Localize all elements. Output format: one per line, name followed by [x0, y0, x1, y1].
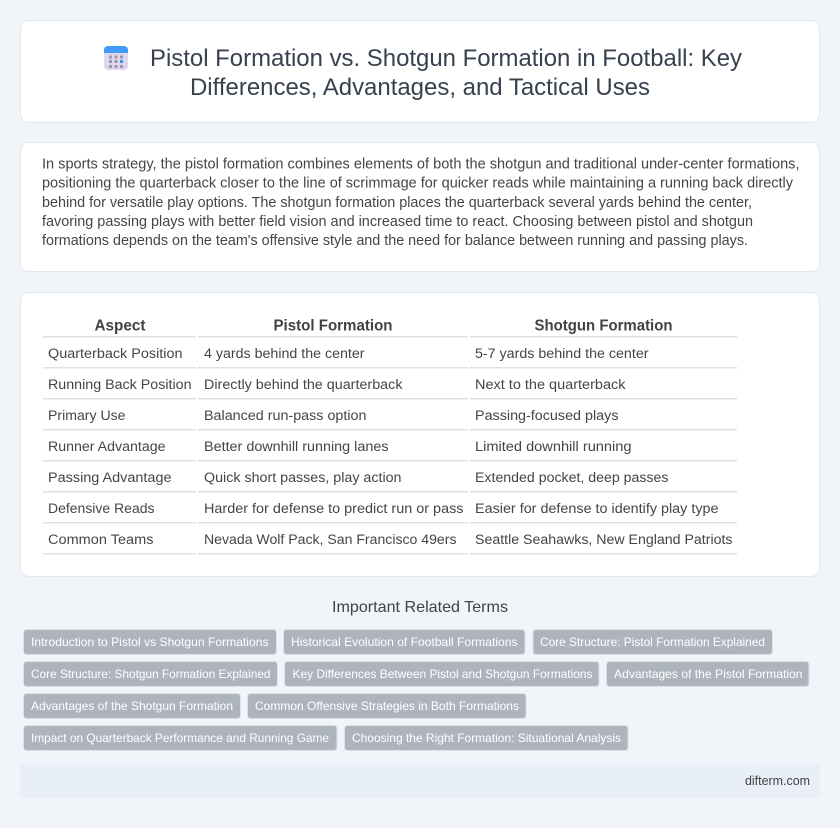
- table header: Aspect: [94, 318, 146, 334]
- row: defensive reads: [48, 501, 719, 517]
- intro text: In sports strategy, the pistol formation combines elements of both the shotgun and traditional under-center formations,: [42, 156, 800, 172]
- tag: Advantages of the Pistol Formation: [614, 667, 802, 681]
- intro text: formations depends on the team's offensive style and the need for balance between running and passing plays.: [42, 233, 748, 249]
- row: running back position: Next to the quarterback: [475, 377, 626, 393]
- header panel: [20, 20, 820, 122]
- row: runner advantage: Limited downhill running: [475, 439, 632, 455]
- panel: comparison table: [20, 292, 820, 576]
- row: defensive reads: Easier for defense to identify play type: [475, 501, 719, 517]
- row: passing advantage: Quick short passes, play action: [204, 470, 402, 486]
- row: passing advantage: Extended pocket, deep passes: [475, 470, 668, 486]
- tag: [284, 630, 525, 654]
- footer bar: [20, 764, 820, 798]
- row: passing advantage: [48, 470, 668, 486]
- tag: Key Differences Between Pistol and Shotgun Formations: [292, 667, 592, 681]
- row: running back position: Running Back Position: [48, 377, 192, 393]
- intro text: positioning the quarterback closer to the line of scrimmage for quicker reads while maintaining a running back directly: [42, 176, 794, 192]
- row: runner advantage: Better downhill running lanes: [204, 439, 388, 455]
- row: quarterback position: 5-7 yards behind the center: [475, 346, 649, 362]
- tag: Common Offensive Strategies in Both Formations: [255, 699, 519, 713]
- tag: [24, 694, 240, 718]
- tag: [606, 662, 809, 686]
- table header: [94, 318, 672, 334]
- intro text: [42, 156, 800, 249]
- row: quarterback position: [48, 346, 649, 362]
- tag: Impact on Quarterback Performance and Running Game: [31, 731, 329, 745]
- title: [150, 45, 742, 101]
- tag: [24, 662, 278, 686]
- related terms tags: [24, 630, 809, 750]
- tag: Historical Evolution of Football Formations: [291, 635, 518, 649]
- row: passing advantage: Passing Advantage: [48, 470, 172, 486]
- icon: calendar: [104, 46, 128, 70]
- intro text: favoring passing plays with better field vision and increased time to react. Choosing between pistol and shotgun: [42, 214, 753, 230]
- table header: Shotgun Formation: [534, 318, 672, 334]
- table rules: [43, 336, 737, 554]
- table header: Pistol Formation: [274, 318, 392, 334]
- row: runner advantage: [48, 439, 632, 455]
- tag: [344, 726, 628, 750]
- title: Differences, Advantages, and Tactical Uses: [190, 74, 650, 101]
- row: common teams: Common Teams: [48, 532, 154, 548]
- tag: [533, 630, 772, 654]
- tag: [24, 726, 337, 750]
- row: primary use: [48, 408, 618, 424]
- tag: [248, 694, 526, 718]
- tag: [284, 662, 599, 686]
- row: quarterback position: 4 yards behind the center: [204, 346, 365, 362]
- panel: introduction: [20, 142, 820, 272]
- row: defensive reads: Defensive Reads: [48, 501, 154, 517]
- title: Pistol Formation vs. Shotgun Formation in Football: Key: [150, 45, 742, 72]
- row: runner advantage: Runner Advantage: [48, 439, 166, 455]
- heading: important related terms: Important Related Terms: [332, 599, 508, 616]
- tag: [24, 630, 276, 654]
- tag: Introduction to Pistol vs Shotgun Formations: [31, 635, 268, 649]
- row: quarterback position: Quarterback Position: [48, 346, 182, 362]
- row: defensive reads: Harder for defense to predict run or pass: [204, 501, 464, 517]
- row: common teams: Nevada Wolf Pack, San Francisco 49ers: [204, 532, 456, 548]
- row: common teams: [48, 532, 732, 548]
- tag: Core Structure: Pistol Formation Explained: [540, 635, 765, 649]
- tag: Advantages of the Shotgun Formation: [31, 699, 233, 713]
- row: running back position: [48, 377, 626, 393]
- row: running back position: Directly behind the quarterback: [204, 377, 403, 393]
- row: common teams: Seattle Seahawks, New England Patriots: [475, 532, 732, 548]
- row: primary use: Balanced run-pass option: [204, 408, 366, 424]
- footer credit: difterm.com: [745, 774, 810, 788]
- row: primary use: Primary Use: [48, 408, 126, 424]
- row: primary use: Passing-focused plays: [475, 408, 618, 424]
- intro text: behind for versatile play options. The shotgun formation places the quarterback several yards behind the center,: [42, 195, 752, 211]
- tag: Core Structure: Shotgun Formation Explained: [31, 667, 270, 681]
- tag: Choosing the Right Formation: Situational Analysis: [352, 731, 621, 745]
